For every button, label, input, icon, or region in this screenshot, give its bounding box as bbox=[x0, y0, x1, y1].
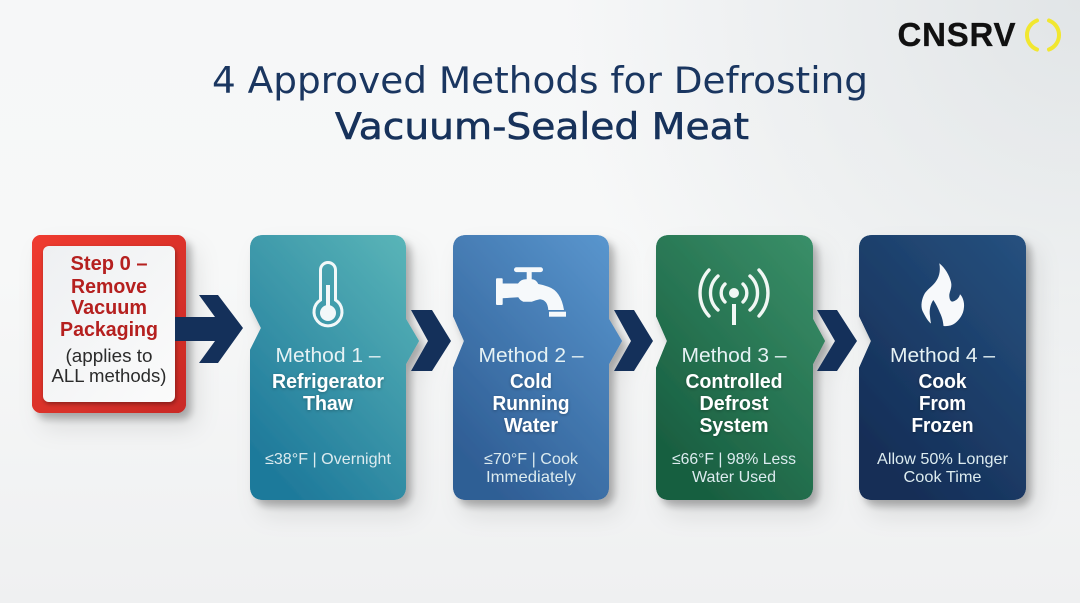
method 2 name: Water bbox=[504, 415, 558, 437]
method 1 name bbox=[272, 371, 384, 415]
panel: method 2 bbox=[453, 235, 622, 500]
method 4 detail bbox=[877, 451, 1009, 486]
method 3 name bbox=[686, 371, 782, 437]
title: Vacuum-Sealed Meat bbox=[335, 105, 749, 148]
method 2 name bbox=[492, 371, 570, 437]
icon: thermometer bbox=[314, 262, 342, 326]
method 4 detail: Allow 50% Longer bbox=[877, 451, 1009, 468]
step 0 heading: Packaging bbox=[60, 319, 158, 341]
arrow: method 1 to method 2 bbox=[411, 310, 451, 371]
arrow: method 3 to method 4 bbox=[817, 310, 857, 371]
icon: flame bbox=[921, 263, 964, 326]
method 3 detail: ≤66°F | 98% Less bbox=[672, 451, 796, 468]
panel: method 3 bbox=[656, 235, 825, 500]
method 3 label: Method 3 – bbox=[682, 345, 787, 367]
method 4 detail: Cook Time bbox=[904, 469, 982, 486]
icon: logo ring bbox=[1027, 20, 1059, 50]
method 4 name: Cook bbox=[918, 371, 967, 393]
step 0 heading: Vacuum bbox=[71, 297, 147, 319]
icon: faucet bbox=[496, 267, 566, 317]
panel: method 1 bbox=[250, 235, 419, 500]
title bbox=[212, 59, 868, 148]
method 4 label: Method 4 – bbox=[890, 345, 996, 367]
method 4 name: Frozen bbox=[912, 415, 974, 437]
method 2 name: Cold bbox=[510, 371, 552, 393]
method 3 detail: Water Used bbox=[692, 469, 776, 486]
method 1 name: Refrigerator bbox=[272, 371, 384, 393]
method 2 label: Method 2 – bbox=[478, 345, 584, 367]
method 4 name: From bbox=[919, 393, 966, 415]
step 0 heading: Step 0 – bbox=[70, 253, 148, 275]
panel: step 0 bbox=[32, 235, 186, 413]
method 3 name: Controlled bbox=[686, 371, 782, 393]
step 0 heading: Remove bbox=[71, 276, 147, 298]
step 0 heading bbox=[60, 253, 158, 341]
logo: CNSRV: CNSRV bbox=[898, 16, 1016, 53]
title: 4 Approved Methods for Defrosting bbox=[212, 59, 868, 102]
method 4 name bbox=[912, 371, 974, 437]
step 0 note: ALL methods) bbox=[52, 366, 166, 386]
arrow: method 2 to method 3 bbox=[614, 310, 653, 371]
method 2 detail: Immediately bbox=[486, 469, 576, 486]
method 3 detail bbox=[672, 451, 796, 486]
method 3 name: Defrost bbox=[700, 393, 769, 415]
step 0 note bbox=[52, 346, 166, 386]
step 0 note: (applies to bbox=[66, 346, 152, 366]
method 2 detail: ≤70°F | Cook bbox=[484, 451, 579, 468]
method 3 name: System bbox=[700, 415, 768, 437]
method 1 detail: ≤38°F | Overnight bbox=[265, 451, 392, 468]
icon: signal antenna bbox=[700, 270, 768, 325]
method 1 name: Thaw bbox=[303, 393, 353, 415]
method 2 detail bbox=[484, 451, 579, 486]
panel: method 4 bbox=[859, 235, 1026, 500]
arrow: step 0 to method 1 bbox=[175, 295, 243, 363]
method 1 label: Method 1 – bbox=[276, 345, 381, 367]
method 2 name: Running bbox=[492, 393, 570, 415]
